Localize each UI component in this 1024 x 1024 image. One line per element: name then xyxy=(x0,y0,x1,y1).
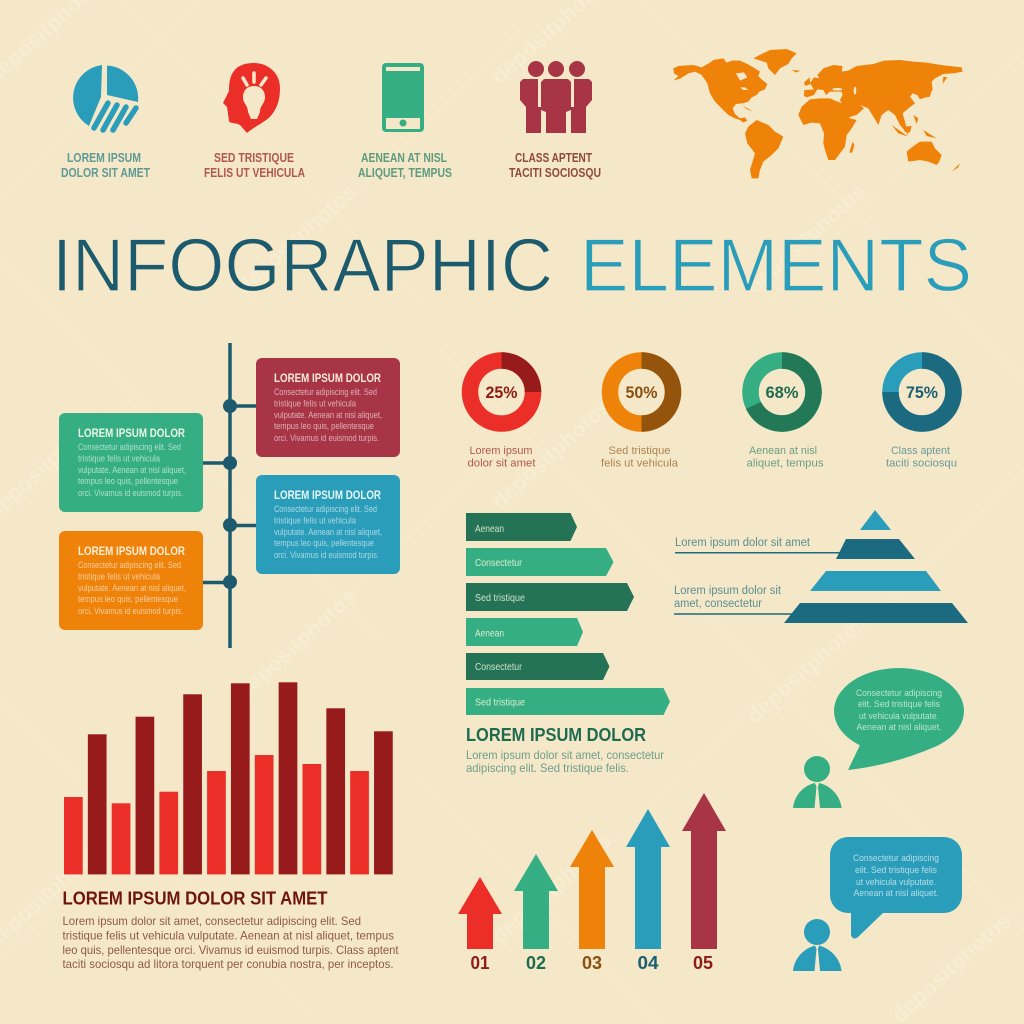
horizontal arrow bars: Aenean xyxy=(475,524,504,535)
panel: orange card: vulputate. Aenean at nisl aliquet, xyxy=(78,583,186,593)
watermark: depositphotos xyxy=(742,609,871,729)
speech bubble: blue: ut vehicula vulputate. xyxy=(856,877,936,888)
bars heading and text: LOREM IPSUM DOLOR xyxy=(466,724,646,745)
arrow 05: 05 xyxy=(693,953,713,973)
horizontal arrow bars: Sed tristique xyxy=(475,593,525,604)
bar chart text: tristique felis ut vehicula vulputate. Aenean at nisl aliquet, tempus xyxy=(62,928,394,942)
donut: 25%: Lorem ipsum xyxy=(470,445,532,457)
panel: green card xyxy=(59,413,203,512)
speech bubble: green xyxy=(834,668,964,770)
donut: 25%: 25% xyxy=(486,383,518,402)
bar chart heading: LOREM IPSUM DOLOR SIT AMET xyxy=(62,888,328,908)
panel: green card: tempus leo quis, pellentesque xyxy=(78,476,178,486)
arrow 05 xyxy=(682,793,726,973)
panel: blue card: orci. Vivamus id euismod turpis. xyxy=(274,550,379,560)
donut: 68%: 68% xyxy=(766,383,798,402)
donut: 75% xyxy=(886,360,957,470)
panel: green card: vulputate. Aenean at nisl aliquet, xyxy=(78,465,186,475)
panel: orange card: LOREM IPSUM DOLOR xyxy=(78,546,186,558)
speech bubble: blue: Consectetur adipiscing xyxy=(853,853,939,864)
bar chart xyxy=(64,682,393,874)
donut: 25% xyxy=(468,360,536,470)
donut: 75%: Class aptent xyxy=(891,445,950,457)
bar chart text: taciti sociosqu ad litora torquent per conubia nostra, per inceptos. xyxy=(62,957,394,971)
panel: orange card: tempus leo quis, pellentesque xyxy=(78,594,178,604)
panel: red card: vulputate. Aenean at nisl aliquet, xyxy=(274,410,382,420)
world map xyxy=(673,49,963,178)
pyramid xyxy=(674,510,968,623)
panel: red card: tristique felis ut vehicula xyxy=(274,398,356,408)
speech bubble: blue: elit. Sed tristique felis xyxy=(855,865,937,876)
person: green xyxy=(793,756,842,808)
icon labels xyxy=(61,151,601,180)
icon: group of people xyxy=(520,61,592,133)
arrow 02: 02 xyxy=(526,953,546,973)
icon labels: CLASS APTENT xyxy=(515,151,592,165)
horizontal arrow bars: Aenean xyxy=(475,628,504,640)
arrow 03 xyxy=(570,830,614,973)
bar chart text: leo quis, pellentesque orci. Vivamus id euismod turpis. Class aptent xyxy=(62,943,399,957)
donut: 68% xyxy=(746,360,824,470)
bars heading and text: Lorem ipsum dolor sit amet, consectetur xyxy=(466,748,664,762)
speech bubble: blue xyxy=(830,837,962,939)
donut: 50% xyxy=(601,360,679,470)
panel: green card: Consectetur adipiscing elit. Sed xyxy=(78,442,181,452)
icon: pie chart xyxy=(73,65,138,130)
watermark: depositphotos xyxy=(232,179,361,299)
panel: blue card xyxy=(256,475,400,574)
panel: blue card: tristique felis ut vehicula xyxy=(274,516,356,526)
arrow 01 xyxy=(458,877,502,973)
donut: 50%: 50% xyxy=(626,383,658,402)
horizontal arrow bars: Consectetur xyxy=(475,662,523,673)
watermark: depositphotos xyxy=(742,179,871,299)
title xyxy=(52,223,972,307)
person: blue xyxy=(793,919,842,971)
panel: red card xyxy=(256,358,400,457)
icon labels: AENEAN AT NISL xyxy=(361,151,447,165)
arrow 04 xyxy=(626,809,670,973)
panel: green card: orci. Vivamus id euismod turpis. xyxy=(78,488,183,498)
donut: 68%: aliquet, tempus xyxy=(746,458,824,470)
pyramid labels: Lorem ipsum dolor sit xyxy=(674,585,782,597)
panel: orange card: tristique felis ut vehicula xyxy=(78,572,160,582)
icon labels: LOREM IPSUM xyxy=(67,151,141,165)
bars heading and text xyxy=(466,724,664,775)
pyramid labels: amet, consectetur xyxy=(674,598,762,610)
donut: 75%: 75% xyxy=(906,383,938,402)
panel: green card: tristique felis ut vehicula xyxy=(78,454,160,464)
title: ELEMENTS xyxy=(580,223,972,307)
horizontal arrow bars: Sed tristique xyxy=(475,698,525,708)
bar chart text: Lorem ipsum dolor sit amet, consectetur adipiscing elit. Sed xyxy=(62,914,361,928)
panel: blue card: tempus leo quis, pellentesque xyxy=(274,538,374,548)
panel: red card: LOREM IPSUM DOLOR xyxy=(274,373,382,385)
arrow 04: 04 xyxy=(638,953,658,973)
speech bubble: green: Consectetur adipiscing xyxy=(856,688,942,699)
speech bubble: green: Aenean at nisl aliquet. xyxy=(856,722,942,733)
icon labels: FELIS UT VEHICULA xyxy=(204,166,305,180)
panel: orange card xyxy=(59,531,203,630)
panel: orange card: Consectetur adipiscing elit. Sed xyxy=(78,560,181,570)
panel: blue card: LOREM IPSUM DOLOR xyxy=(274,490,382,502)
timeline xyxy=(59,343,400,648)
watermark: depositphotos xyxy=(487,394,616,514)
watermark: depositphotos xyxy=(232,584,361,704)
icon: smartphone xyxy=(382,63,424,132)
icon: head with light bulb xyxy=(223,63,280,133)
icon labels: TACITI SOCIOSQU xyxy=(509,166,601,180)
donut: 75%: taciti sociosqu xyxy=(886,458,957,470)
horizontal arrow bars xyxy=(466,513,670,715)
panel: blue card: vulputate. Aenean at nisl aliquet, xyxy=(274,527,382,537)
arrow 02 xyxy=(514,854,558,973)
speech bubble: green: ut vehicula vulputate. xyxy=(859,711,939,722)
speech bubble: blue: Aenean at nisl aliquet. xyxy=(854,888,938,899)
donut: 50%: felis ut vehicula xyxy=(601,458,679,470)
watermark: depositphotos xyxy=(487,829,616,949)
panel: orange card: orci. Vivamus id euismod turpis. xyxy=(78,606,183,616)
bar chart text xyxy=(62,914,399,971)
donut: 50%: Sed tristique xyxy=(608,445,670,457)
icon labels: ALIQUET, TEMPUS xyxy=(358,166,452,180)
icon labels: DOLOR SIT AMET xyxy=(61,166,150,180)
panel: red card: orci. Vivamus id euismod turpis. xyxy=(274,433,379,443)
horizontal arrow bars: Consectetur xyxy=(475,558,523,569)
pyramid labels: Lorem ipsum dolor sit amet xyxy=(675,537,811,549)
icon labels: SED TRISTIQUE xyxy=(214,151,294,165)
panel: red card: tempus leo quis, pellentesque xyxy=(274,421,374,431)
panel: blue card: Consectetur adipiscing elit. Sed xyxy=(274,504,377,514)
speech bubble: green: elit. Sed tristique felis xyxy=(858,699,940,710)
panel: green card: LOREM IPSUM DOLOR xyxy=(78,428,186,440)
bars heading and text: adipiscing elit. Sed tristique felis. xyxy=(466,761,629,775)
pyramid labels xyxy=(674,537,811,610)
title: INFOGRAPHIC xyxy=(52,223,553,307)
donut: 25%: dolor sit amet xyxy=(468,458,536,470)
donut: 68%: Aenean at nisl xyxy=(749,445,817,457)
arrow 01: 01 xyxy=(470,953,490,973)
panel: red card: Consectetur adipiscing elit. Sed xyxy=(274,387,377,397)
arrow 03: 03 xyxy=(582,953,602,973)
